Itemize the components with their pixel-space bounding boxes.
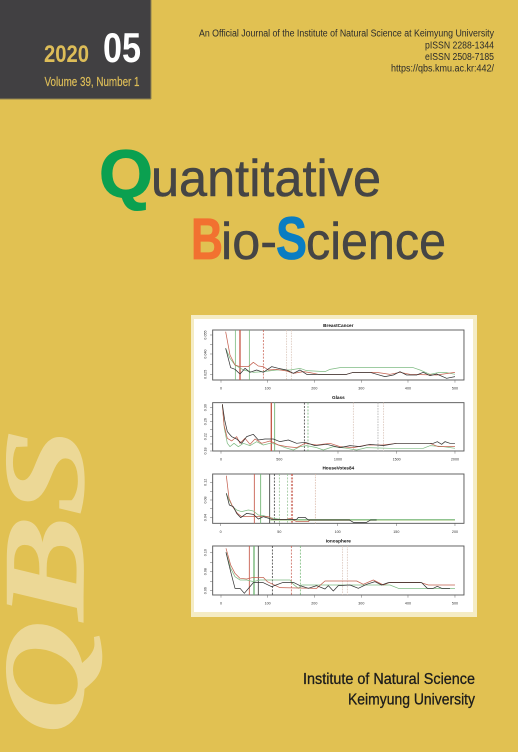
chart: Glass: 500: [276, 457, 282, 461]
chart: BreastCancer: [203, 323, 464, 390]
chart: HouseVotes84: 0.04: [203, 514, 207, 521]
journal info: [199, 28, 494, 74]
chart: HouseVotes84: 50: [277, 530, 281, 534]
chart: HouseVotes84: 0: [220, 530, 222, 534]
chart: Ionosphere: 200: [311, 601, 317, 605]
chart: Ionosphere: 100: [265, 601, 271, 605]
journal info: eISSN 2508-7185: [425, 52, 494, 63]
issue number: 05: [103, 24, 141, 71]
chart: Glass: 0.22: [203, 433, 207, 440]
chart: Glass: 0: [220, 457, 222, 461]
chart: HouseVotes84: 0.08: [203, 496, 207, 504]
publisher: Institute of Natural Science: [303, 671, 475, 688]
chart: BreastCancer: 0.025: [203, 370, 207, 379]
chart: Glass: 0.30: [203, 404, 207, 411]
chart: Glass: 0.26: [203, 418, 207, 425]
publisher: [303, 671, 475, 708]
chart: HouseVotes84: 200: [452, 530, 458, 534]
chart: Ionosphere: 500: [452, 601, 458, 605]
chart: HouseVotes84: 0.12: [203, 479, 207, 486]
journal title: uantitative: [151, 150, 381, 208]
chart: BreastCancer: 0: [220, 386, 222, 390]
chart: HouseVotes84: HouseVotes84: [322, 466, 355, 471]
issue block: [0, 0, 152, 100]
chart: Glass: 2000: [451, 457, 459, 461]
chart: BreastCancer: 400: [405, 386, 411, 390]
journal title: [99, 136, 446, 272]
chart: Ionosphere: [203, 538, 464, 605]
chart: BreastCancer: 300: [358, 386, 364, 390]
volume: Volume 39, Number 1: [44, 74, 140, 89]
journal info: pISSN 2288-1344: [425, 40, 494, 52]
journal title: B: [191, 207, 223, 272]
journal title: cience: [306, 213, 446, 271]
chart: BreastCancer: 0.040: [203, 349, 207, 359]
chart: BreastCancer: BreastCancer: [323, 323, 354, 328]
chart: BreastCancer: 200: [311, 386, 317, 390]
journal title: S: [276, 205, 307, 272]
chart: BreastCancer: 0.055: [203, 330, 207, 340]
chart: Ionosphere: 0.10: [203, 549, 207, 556]
chart: Ionosphere: Ionosphere: [326, 538, 351, 543]
chart: HouseVotes84: 100: [335, 530, 341, 534]
chart: Glass: [203, 395, 464, 461]
chart: Ionosphere: 400: [405, 601, 411, 605]
chart: HouseVotes84: 150: [393, 530, 399, 534]
journal title: io-: [221, 213, 277, 271]
chart: Glass: 0.18: [203, 447, 207, 455]
chart: Ionosphere: 0: [220, 601, 222, 605]
chart: BreastCancer: 500: [452, 386, 458, 390]
figure panel: [191, 315, 477, 617]
chart: HouseVotes84: [203, 466, 464, 534]
chart: Glass: Glass: [332, 395, 345, 400]
chart: BreastCancer: 100: [265, 386, 271, 390]
chart: Ionosphere: 0.08: [203, 568, 207, 575]
journal title: Q: [99, 136, 153, 212]
chart: Ionosphere: 0.06: [203, 587, 207, 594]
chart: Glass: 1500: [393, 457, 401, 461]
journal info: https://qbs.kmu.ac.kr:442/: [391, 64, 494, 74]
chart: Ionosphere: 300: [358, 601, 364, 605]
chart: Glass: 1000: [334, 457, 342, 461]
publisher: Keimyung University: [348, 692, 475, 708]
year: 2020: [44, 41, 89, 68]
